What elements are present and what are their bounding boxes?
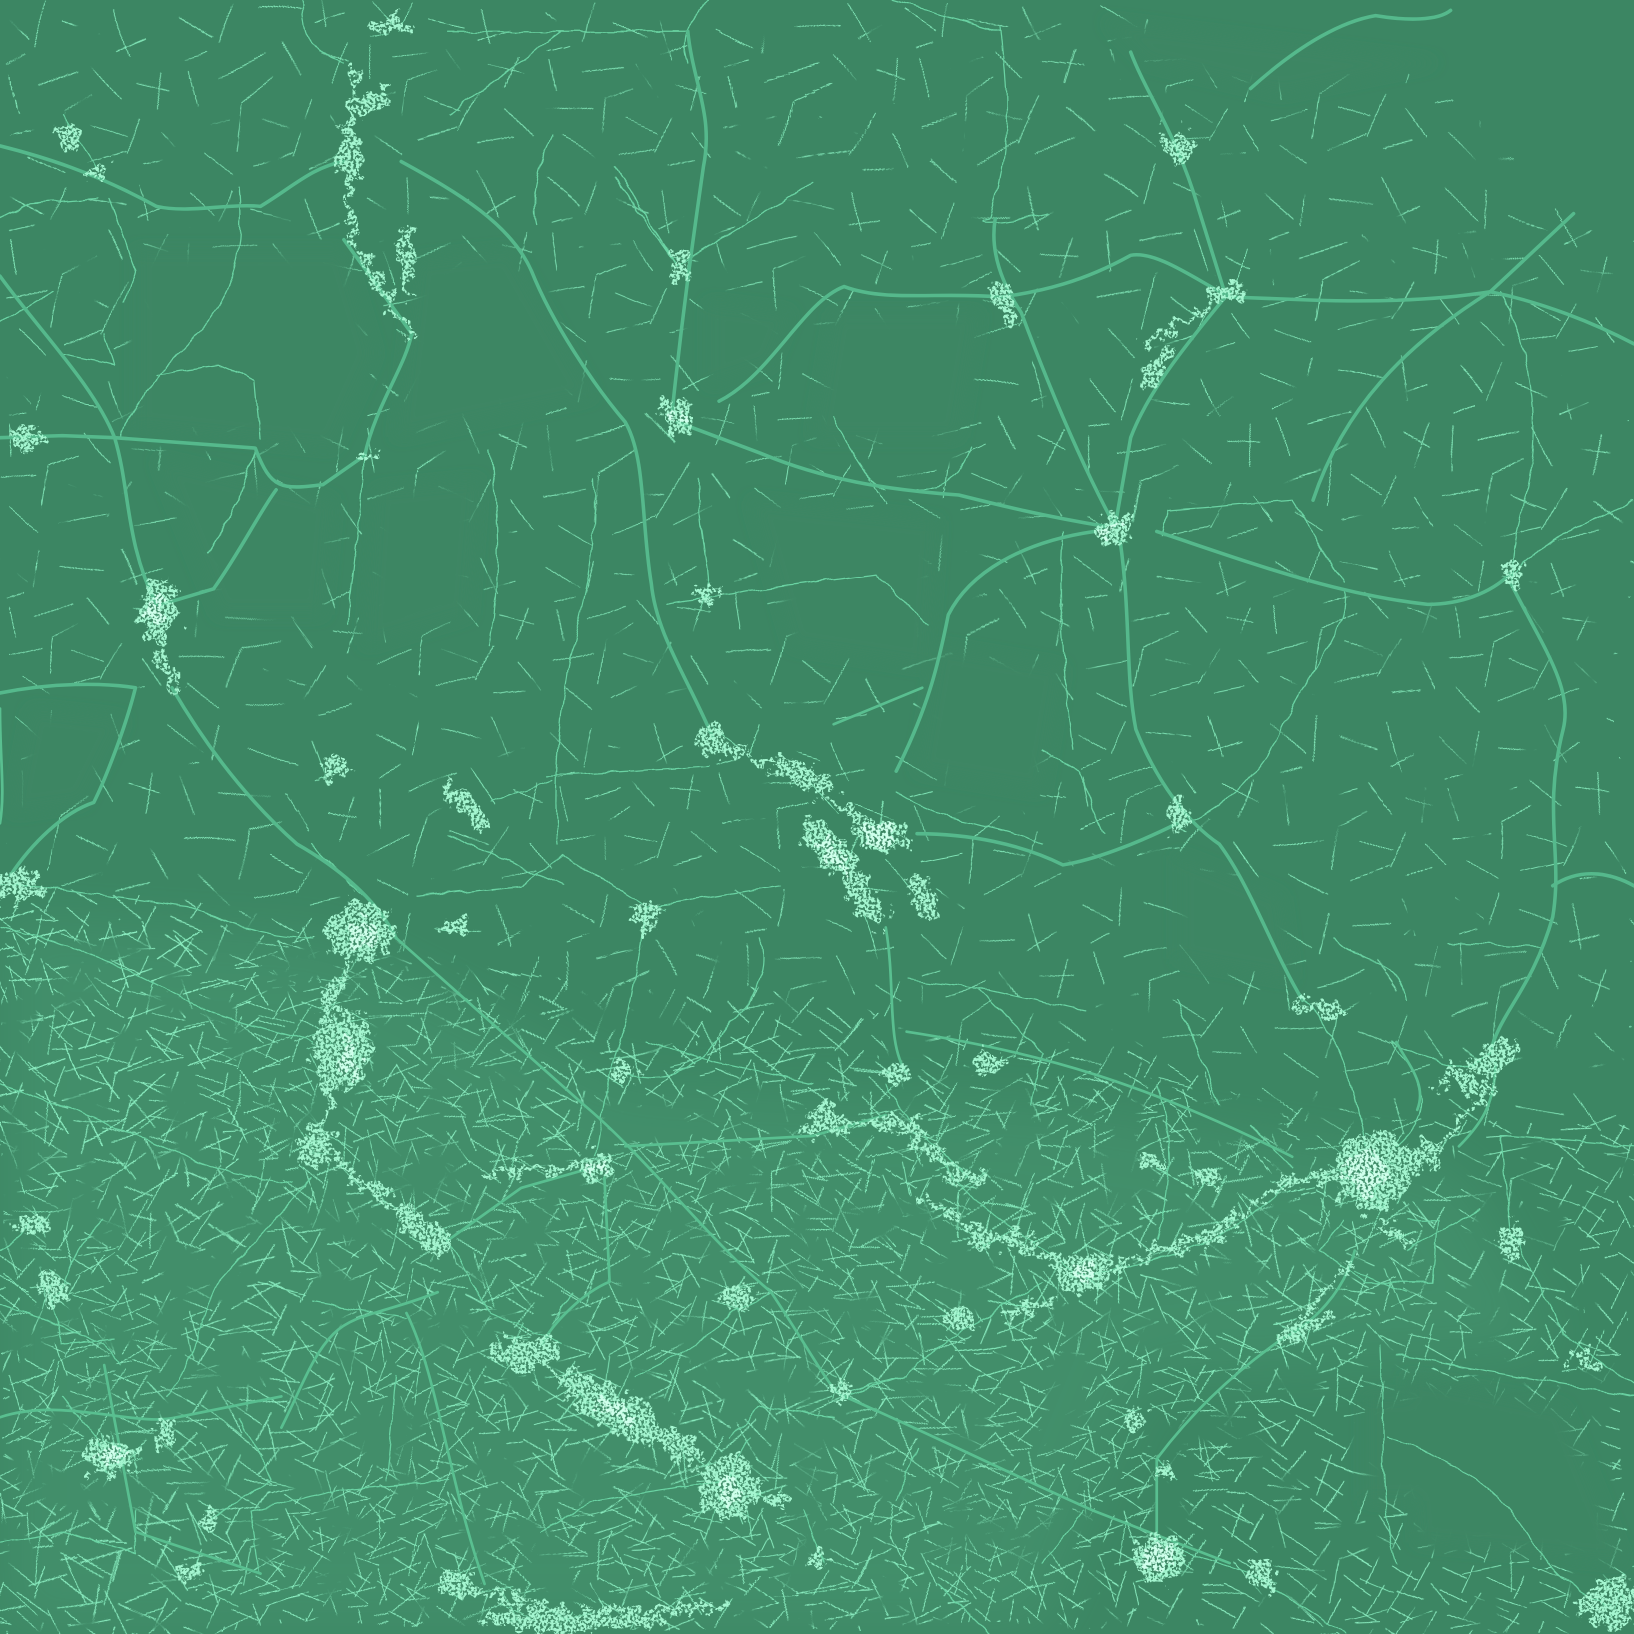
road: east from hub — [677, 422, 1105, 526]
texture: south cross-hatch — [0, 896, 1459, 1634]
road: northern spine — [672, 31, 706, 412]
road: north-east diagonals — [994, 10, 1574, 526]
road: southern network — [396, 938, 1230, 1563]
bright city cores — [97, 406, 1388, 1570]
city: north-west — [59, 15, 413, 294]
road: north corridor east — [719, 255, 1634, 401]
texture: south dense band — [0, 875, 1634, 1634]
city: central south towns — [443, 902, 1235, 1400]
road: north-west trunk — [0, 146, 344, 209]
texture: south-east — [709, 1146, 1355, 1386]
city: eastern metropolis — [1281, 997, 1596, 1368]
road: central north-south — [401, 162, 714, 740]
road: southern spurs — [448, 927, 1292, 1344]
road: west network — [0, 240, 412, 875]
road: southern links — [0, 1251, 1355, 1584]
road: outer links — [0, 688, 1495, 1574]
motorways and main roads — [0, 10, 1634, 1053]
texture: south-west farmland — [0, 896, 344, 1209]
road: eastern links — [1157, 531, 1634, 1053]
city: northern hubs — [353, 127, 1524, 832]
city: small southern towns — [200, 1050, 1524, 1534]
city: west-south chain — [15, 901, 454, 1308]
soft density glow — [0, 917, 1563, 1634]
city: western hub — [0, 425, 352, 900]
city: southern chain — [84, 1337, 1634, 1631]
road: central-east south — [896, 531, 1303, 1000]
city: central chain — [437, 719, 941, 936]
road: south-west link — [172, 688, 396, 938]
